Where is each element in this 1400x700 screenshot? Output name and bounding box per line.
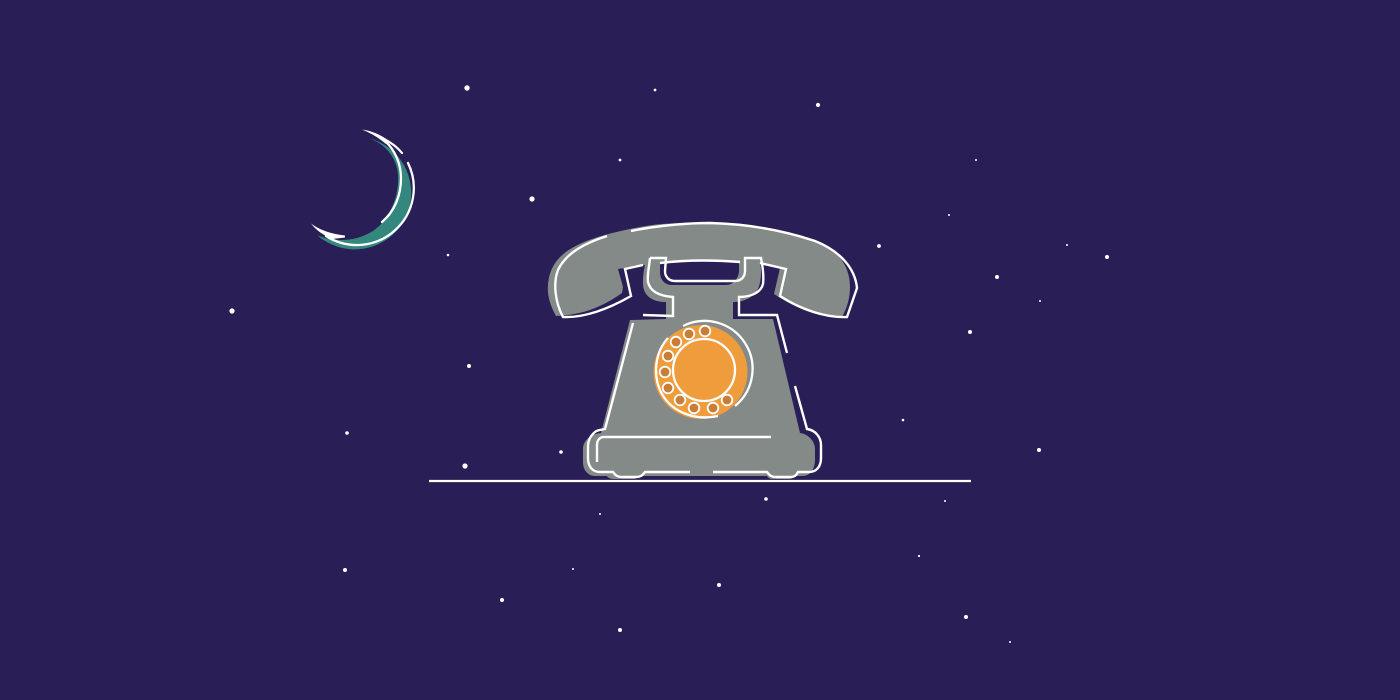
crescent moon [311, 130, 414, 249]
dial centre [673, 339, 735, 401]
ground line [429, 480, 971, 482]
stars [229, 85, 1109, 643]
moon white strokes [311, 130, 414, 245]
telephone grey silhouette [548, 223, 850, 479]
telephone [548, 223, 857, 479]
white outline strokes [555, 223, 857, 477]
moon teal crescent [317, 138, 411, 249]
rotary dial [654, 321, 753, 419]
dial plate [654, 325, 748, 419]
finger holes [660, 326, 732, 413]
